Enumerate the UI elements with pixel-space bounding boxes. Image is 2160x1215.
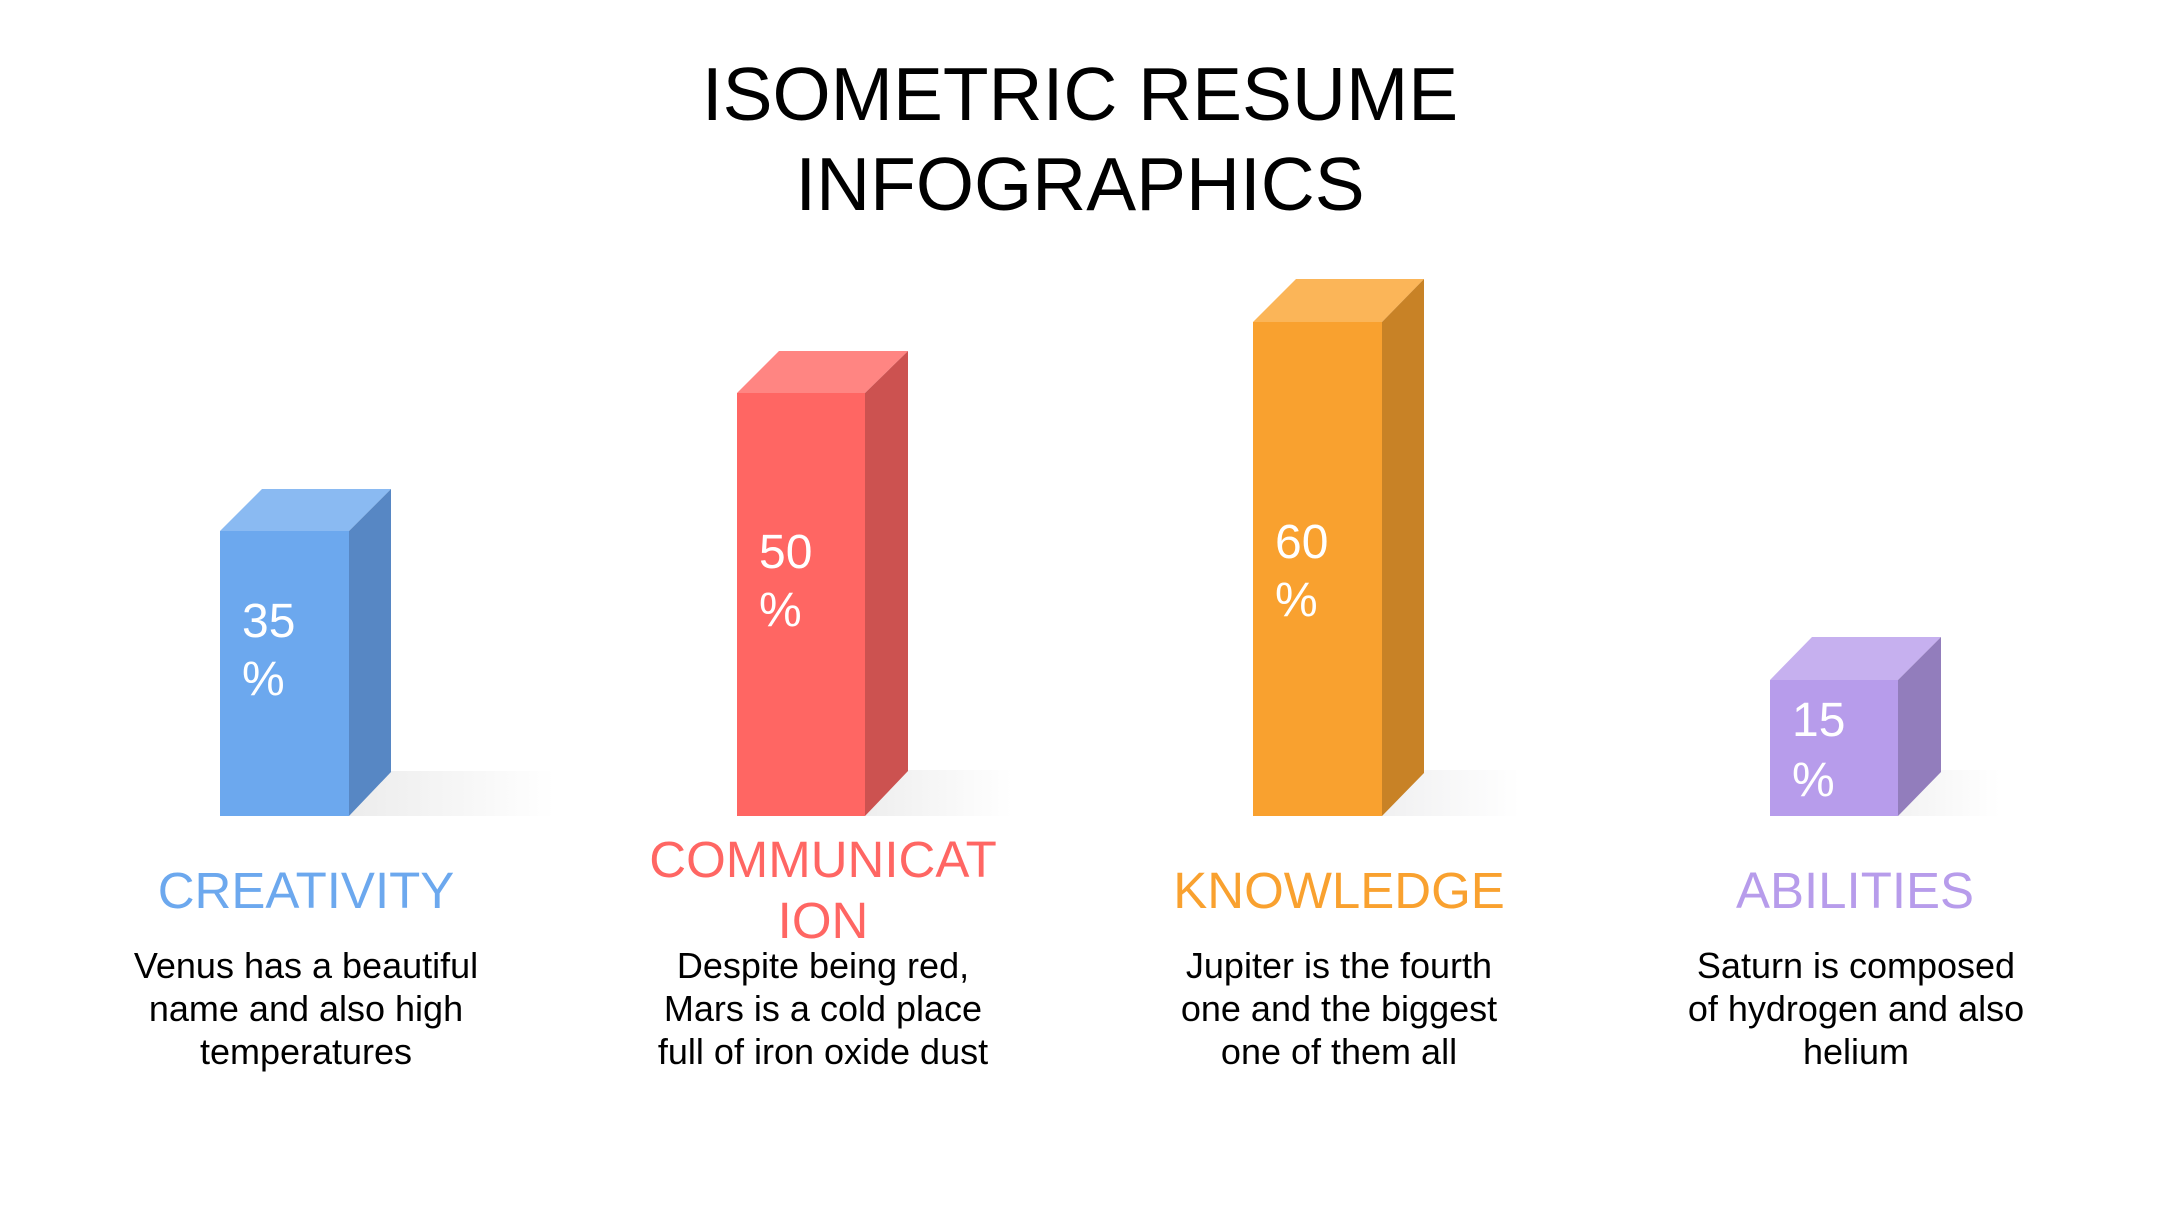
value: 35%: %	[242, 653, 285, 706]
heading: knowledge: KNOWLEDGE	[1173, 862, 1505, 919]
title	[702, 52, 1458, 226]
value: 15%: 15	[1792, 694, 1845, 747]
bar shadow: communication	[865, 770, 1012, 816]
value: 60%: %	[1275, 574, 1318, 627]
value: 50%: %	[759, 584, 802, 637]
description: creativity: temperatures	[200, 1031, 412, 1072]
panel: creativity	[134, 489, 555, 1072]
isometric bar: knowledge	[1253, 279, 1424, 816]
description: communication: Despite being red,	[677, 945, 969, 986]
panel: abilities	[1688, 637, 2024, 1072]
description: abilities: helium	[1803, 1031, 1909, 1072]
value: 60%: 60	[1275, 516, 1328, 569]
description: knowledge: one of them all	[1221, 1031, 1457, 1072]
isometric bar: creativity	[220, 489, 391, 816]
bar shadow: creativity	[349, 771, 555, 816]
heading: creativity: CREATIVITY	[158, 862, 454, 919]
description: communication: full of iron oxide dust	[658, 1031, 988, 1072]
description: communication: Mars is a cold place	[664, 988, 982, 1029]
description: creativity: Venus has a beautiful	[134, 945, 478, 986]
heading: abilities: ABILITIES	[1736, 862, 1974, 919]
description: knowledge: one and the biggest	[1181, 988, 1497, 1029]
panel: communication	[649, 351, 1012, 1072]
isometric bar: communication	[737, 351, 908, 816]
value: 15%: %	[1792, 754, 1835, 807]
bar shadow: abilities	[1898, 770, 2000, 816]
heading: communication: ION	[778, 892, 868, 949]
value: 35%: 35	[242, 595, 295, 648]
title: INFOGRAPHICS	[795, 142, 1365, 226]
description: abilities: of hydrogen and also	[1688, 988, 2024, 1029]
value: 50%: 50	[759, 526, 812, 579]
title: ISOMETRIC RESUME	[702, 52, 1458, 136]
heading: communication: COMMUNICAT	[649, 831, 997, 888]
description: abilities: Saturn is composed	[1697, 945, 2015, 986]
description: creativity: name and also high	[149, 988, 463, 1029]
description: knowledge: Jupiter is the fourth	[1186, 945, 1492, 986]
isometric bar: abilities	[1770, 637, 1941, 816]
bar shadow: knowledge	[1382, 770, 1520, 816]
panel: knowledge	[1173, 279, 1520, 1072]
